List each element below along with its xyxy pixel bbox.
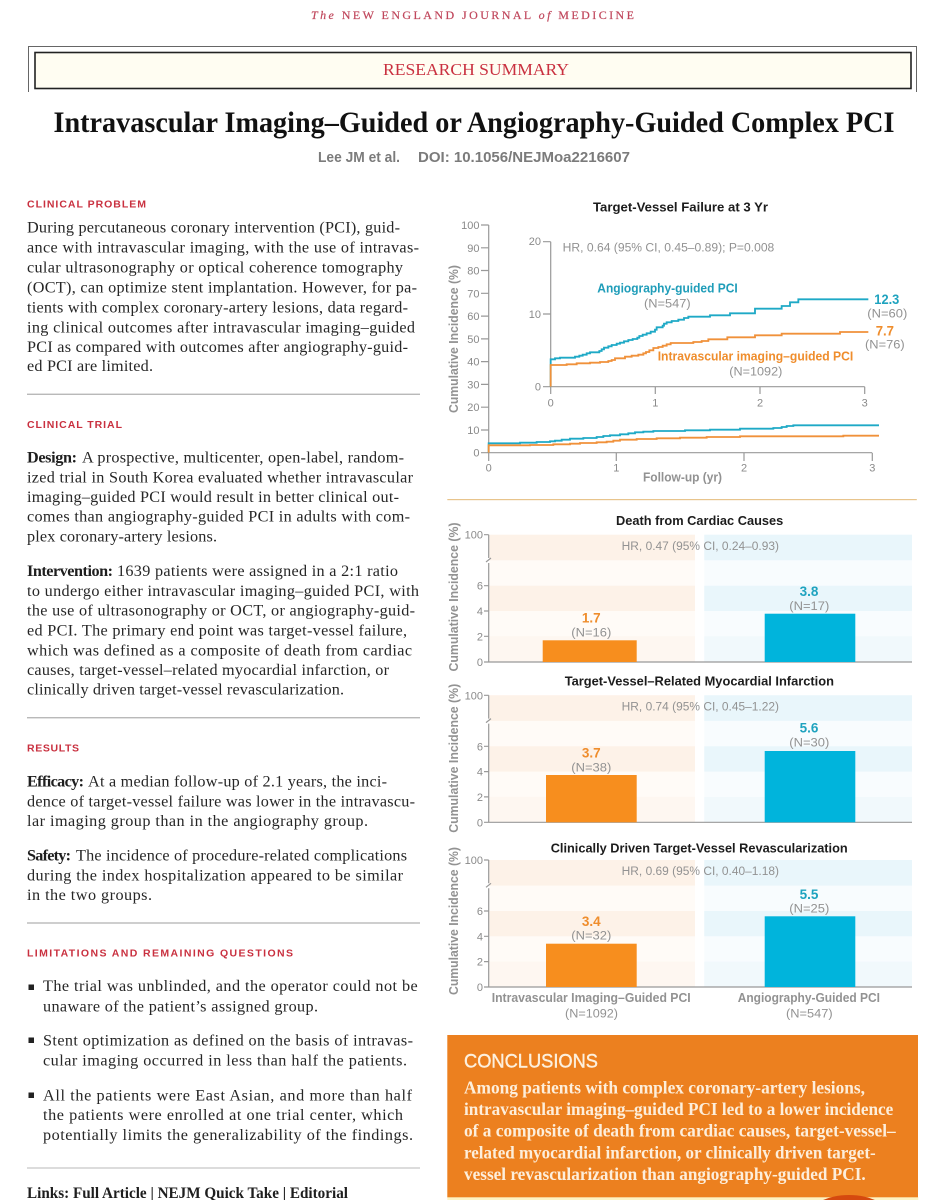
group label: angiography: (N=547): [786, 1009, 833, 1021]
y tick labels: 0: [477, 657, 483, 669]
y tick labels: 0: [477, 982, 483, 994]
background bands: [489, 695, 912, 822]
chart title: Clinically Driven Target-Vessel Revascularization: [551, 841, 848, 856]
series label: imaging: (N=1092): [729, 367, 782, 379]
y tick labels: 4: [477, 606, 483, 618]
research summary banner: [28, 46, 916, 92]
research summary banner: RESEARCH SUMMARY: [383, 60, 569, 79]
text block: efficacy: Efficacy:: [27, 773, 84, 791]
text block: clinical problem: PCI as compared with outcomes after angiography-guid-: [27, 338, 408, 356]
panel: target-vessel-related myocardial infarction: [447, 673, 912, 833]
outer x axis ticks: 0: [486, 463, 492, 475]
authors and DOI: [318, 150, 630, 166]
y tick labels: 100: [465, 690, 483, 702]
heading: results: RESULTS: [27, 742, 79, 754]
y tick labels: 100: [465, 530, 483, 542]
inset curve: angiography: [551, 299, 868, 387]
bullet: East Asian patients: the patients were enrolled at one trial center, which: [43, 1106, 403, 1124]
text block: conclusions: intravascular imaging–guided PCI led to a lower incidence: [464, 1099, 893, 1119]
axes: [484, 860, 912, 987]
authors and DOI: DOI: 10.1056/NEJMoa2216607: [418, 150, 630, 166]
chart title: Death from Cardiac Causes: [616, 513, 783, 528]
background bands: [489, 535, 912, 662]
text block: intervention: Intervention:: [27, 562, 113, 580]
journal masthead: The NEW ENGLAND JOURNAL of MEDICINE: [311, 8, 634, 22]
outer y axis ticks: 40: [467, 357, 480, 369]
inset tick labels: 2: [757, 398, 763, 410]
bar: imaging 1.7: (N=16): [571, 628, 611, 640]
chart title: Target-Vessel–Related Myocardial Infarction: [565, 673, 834, 688]
y tick labels: 6: [477, 741, 483, 753]
text block: safety: in the two groups.: [27, 886, 152, 904]
y tick labels: [465, 855, 483, 994]
inset tick labels: 1: [652, 398, 658, 410]
bar: angiography 5.6: (N=30): [789, 738, 829, 750]
outer x axis ticks: 2: [741, 463, 747, 475]
text block: intervention: to undergo either intravascular imaging–guided PCI, with: [27, 582, 419, 600]
text block: efficacy: [27, 773, 415, 830]
inset axes: [543, 242, 865, 394]
y tick labels: 2: [477, 631, 483, 643]
panel: clinical problem: [27, 198, 419, 375]
bullet: East Asian patients: potentially limits the generalizability of the findings.: [43, 1126, 413, 1144]
series label: angiography: Angiography-guided PCI: [597, 280, 738, 295]
bullet: stent optimization: [28, 1032, 413, 1070]
outer x axis ticks: 3: [869, 463, 875, 475]
axes: [484, 695, 912, 822]
outer y axis ticks: 10: [467, 425, 480, 437]
end value: angiography: (N=60): [867, 309, 907, 321]
group label: angiography: [738, 991, 880, 1021]
inset tick labels: 0: [535, 382, 541, 394]
text block: design: plex coronary-artery lesions.: [27, 528, 217, 546]
panel: clinical trial: [27, 419, 419, 699]
inset tick labels: 3: [862, 398, 868, 410]
heading: limitations: LIMITATIONS AND REMAINING QUESTIONS: [27, 948, 293, 960]
end value: imaging: (N=76): [865, 339, 905, 351]
bar: angiography 5.6: [765, 721, 855, 822]
group label: angiography: Angiography-Guided PCI: [738, 991, 880, 1005]
text block: conclusions: of a composite of death from cardiac causes, target-vessel–: [464, 1121, 897, 1141]
bar: imaging 1.7: [543, 611, 637, 662]
text block: intervention: [27, 562, 419, 699]
bar: angiography 5.6: 5.6: [800, 721, 819, 736]
text block: clinical problem: ed PCI are limited.: [27, 357, 153, 375]
group label: imaging: Intravascular Imaging–Guided PCI: [492, 991, 691, 1005]
outer y axis ticks: 0: [473, 448, 480, 460]
text block: clinical problem: ing clinical outcomes after intravascular imaging–guided: [27, 318, 415, 336]
y tick labels: 6: [477, 581, 483, 593]
outer y axis ticks: 70: [467, 288, 480, 300]
bar: angiography 3.8: (N=17): [789, 601, 829, 613]
x axis label: Follow-up (yr): [643, 471, 722, 485]
bar: angiography 5.5: 5.5: [800, 887, 819, 902]
bar: angiography 3.8: 3.8: [800, 584, 819, 599]
y tick labels: 4: [477, 767, 483, 779]
end value: angiography: 12.3: [874, 292, 900, 307]
bar: imaging 3.7: [546, 745, 637, 822]
text block: clinical problem: [27, 219, 419, 375]
group label: imaging: [492, 991, 691, 1021]
text block: clinical problem: tients with complex coronary-artery lesions, data regard-: [27, 298, 408, 316]
y axis label: Cumulative Incidence (%): [447, 684, 461, 833]
outer x axis ticks: 1: [613, 463, 619, 475]
y tick labels: 2: [477, 957, 483, 969]
text block: efficacy: lar imaging group than in the angiography group.: [27, 812, 368, 830]
bar: imaging 3.4: 3.4: [582, 914, 601, 929]
icon: cropped circle at page bottom: [809, 1195, 889, 1200]
outer curve: angiography: [489, 425, 879, 453]
text block: efficacy: dence of target-vessel failure was lower in the intravascu-: [27, 792, 415, 810]
text block: design: imaging–guided PCI would result in better clinical out-: [27, 488, 399, 506]
chart title: Target-Vessel Failure at 3 Yr: [593, 200, 768, 215]
text block: conclusions: vessel revascularization than angiography-guided PCI.: [464, 1164, 866, 1184]
text block: safety: Safety:: [27, 847, 71, 865]
bar: imaging 3.4: [546, 914, 637, 987]
inset tick labels: 20: [529, 236, 541, 248]
y tick labels: 0: [477, 817, 483, 829]
panel: limitations and remaining questions: [27, 948, 418, 1144]
text block: conclusions: Among patients with complex coronary-artery lesions,: [464, 1077, 865, 1097]
panel: conclusions: [447, 1035, 918, 1200]
text block: intervention: the use of ultrasonography or OCT, or angiography-guid-: [27, 602, 415, 620]
panel: target-vessel failure chart: [447, 200, 907, 485]
y axis label: Cumulative Incidence (%): [447, 522, 461, 672]
text block: design: A prospective, multicenter, open-label, random-: [82, 449, 404, 467]
text block: design: [27, 449, 414, 546]
authors and DOI: Lee JM et al.: [318, 150, 400, 166]
y axis label: Cumulative Incidence (%): [447, 265, 461, 413]
text block: efficacy: At a median follow-up of 2.1 years, the inci-: [88, 773, 387, 791]
text block: design: Design:: [27, 449, 77, 467]
bullet: stent optimization: cular imaging occurred in less than half the patients.: [43, 1052, 407, 1070]
group label: imaging: (N=1092): [565, 1009, 618, 1021]
text block: safety: The incidence of procedure-related complications: [76, 847, 407, 865]
end value: angiography: [867, 292, 907, 321]
bar: angiography 3.8: [765, 584, 855, 662]
text block: intervention: causes, target-vessel–related myocardial infarction, or: [27, 661, 390, 679]
y tick labels: [465, 690, 483, 829]
panel: death from cardiac causes: [447, 513, 912, 672]
title: Intravascular Imaging–Guided or Angiography-Guided Complex PCI: [54, 107, 894, 139]
text block: clinical problem: cular ultrasonography or optical coherence tomography: [27, 259, 404, 277]
y tick labels: 100: [465, 855, 483, 867]
text block: conclusions: related myocardial infarction, or clinically driven target-: [464, 1142, 876, 1162]
y tick labels: 6: [477, 906, 483, 918]
bullet: unblinded trial: [28, 977, 418, 1015]
series label: imaging: [658, 349, 853, 379]
y tick labels: 4: [477, 931, 483, 943]
background bands: [489, 860, 912, 987]
axes: [484, 535, 912, 662]
heading: conclusions: CONCLUSIONS: [464, 1052, 598, 1073]
bar: angiography 5.5: [765, 887, 855, 987]
inset tick labels: [529, 236, 868, 410]
text block: intervention: 1639 patients were assigned in a 2:1 ratio: [117, 562, 398, 580]
text block: design: comes than angiography-guided PCI in adults with com-: [27, 508, 410, 526]
text block: intervention: which was defined as a composite of death from cardiac: [27, 641, 412, 659]
text block: safety: [27, 847, 407, 904]
text block: clinical problem: (OCT), can optimize stent implantation. However, for pa-: [27, 279, 417, 297]
outer y axis ticks: 20: [467, 402, 480, 414]
hazard ratio: HR, 0.74 (95% CI, 0.45–1.22): [622, 702, 779, 714]
heading: clinical problem: CLINICAL PROBLEM: [27, 198, 146, 210]
outer y axis ticks: 30: [467, 379, 480, 391]
series label: imaging: Intravascular imaging–guided PCI: [658, 349, 853, 364]
outer x axis ticks: [486, 463, 875, 475]
hazard ratio: HR, 0.47 (95% CI, 0.24–0.93): [622, 541, 779, 553]
text block: intervention: ed PCI. The primary end point was target-vessel failure,: [27, 622, 407, 640]
bar: imaging 3.7: (N=38): [571, 763, 611, 775]
outer y axis ticks: [461, 220, 480, 460]
bullet: East Asian patients: All the patients were East Asian, and more than half: [43, 1086, 413, 1104]
y axis label: Cumulative Incidence (%): [447, 847, 461, 995]
inset tick labels: 0: [548, 398, 554, 410]
text block: clinical problem: During percutaneous coronary intervention (PCI), guid-: [27, 219, 400, 237]
series label: angiography: (N=547): [644, 299, 691, 311]
end value: imaging: [865, 324, 905, 351]
text block: design: ized trial in South Korea evaluated whether intravascular: [27, 468, 414, 486]
bullet: stent optimization: Stent optimization as defined on the basis of intravas-: [43, 1032, 413, 1050]
heading: clinical trial: CLINICAL TRIAL: [27, 419, 123, 431]
text block: conclusions: [464, 1077, 897, 1184]
hazard ratio: HR, 0.64 (95% CI, 0.45–0.89); P=0.008: [563, 243, 774, 255]
bar: imaging 3.7: 3.7: [582, 745, 601, 760]
hazard ratio: HR, 0.69 (95% CI, 0.40–1.18): [622, 866, 779, 878]
text block: intervention: clinically driven target-vessel revascularization.: [27, 681, 344, 699]
text block: clinical problem: ance with intravascular imaging, with the use of intravas-: [27, 239, 419, 257]
text block: safety: during the index hospitalization appeared to be similar: [27, 866, 404, 884]
outer y axis ticks: 90: [467, 243, 480, 255]
y tick labels: 2: [477, 792, 483, 804]
inset curve: imaging: [551, 332, 868, 387]
panel: clinically driven revascularization: [447, 841, 912, 1021]
bullet: unblinded trial: unaware of the patient’s assigned group.: [43, 997, 318, 1015]
bar: imaging 3.4: (N=32): [571, 931, 611, 943]
outer y axis ticks: 60: [467, 311, 480, 323]
outer y axis ticks: 80: [467, 266, 480, 278]
inset tick labels: 10: [529, 309, 541, 321]
outer axes: [481, 225, 872, 461]
outer curve: imaging: [489, 436, 879, 453]
outer y axis ticks: 50: [467, 334, 480, 346]
bar: angiography 5.5: (N=25): [789, 903, 829, 915]
series label: angiography: [597, 280, 738, 311]
outer y axis ticks: 100: [461, 220, 480, 232]
panel: results: [27, 742, 415, 904]
end value: imaging: 7.7: [876, 324, 894, 339]
bullet: East Asian patients: [28, 1086, 413, 1144]
y tick labels: [465, 530, 483, 669]
bullet: unblinded trial: The trial was unblinded, and the operator could not be: [43, 977, 418, 995]
bar: imaging 1.7: 1.7: [582, 611, 601, 626]
